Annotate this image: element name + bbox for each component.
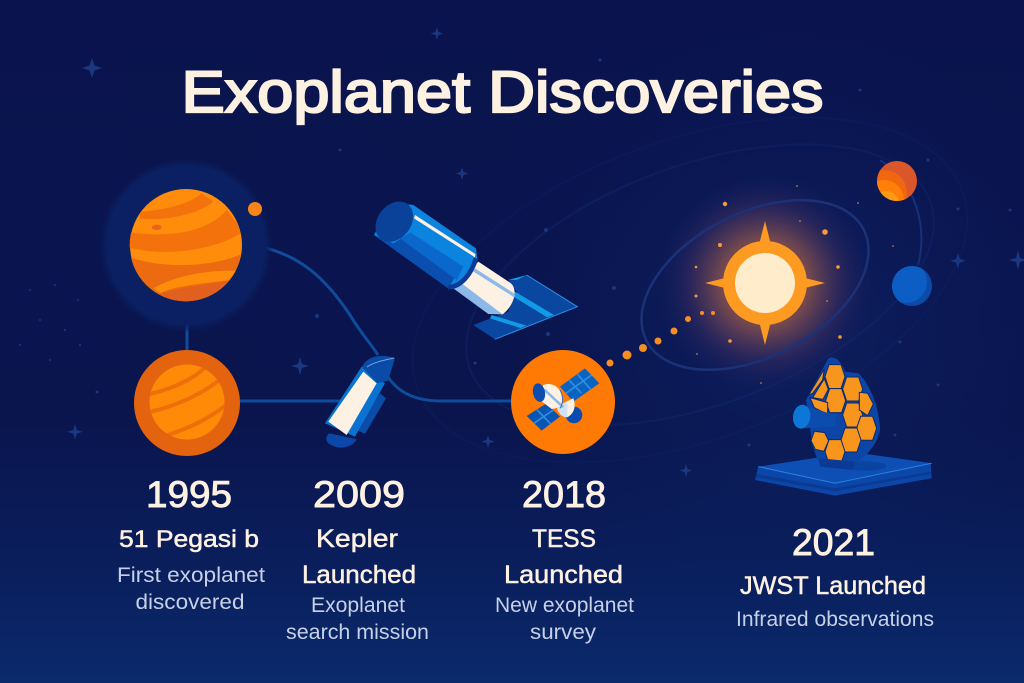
icon: James Webb telescope xyxy=(755,358,932,496)
mirror backing xyxy=(806,358,880,470)
name: Kepler xyxy=(316,525,398,553)
name: Launched xyxy=(302,561,416,589)
description: survey xyxy=(530,621,597,644)
satellite body xyxy=(566,407,582,423)
orbit around sun xyxy=(614,165,896,405)
name xyxy=(302,525,416,589)
column: 2021 xyxy=(736,522,934,631)
tube xyxy=(374,205,477,288)
title: Exoplanet Discoveries xyxy=(182,60,824,125)
name xyxy=(504,525,623,589)
description xyxy=(495,594,634,644)
planet: red-orange xyxy=(877,161,917,201)
description xyxy=(117,564,265,614)
planet: ringed orange disc xyxy=(134,350,240,456)
planet: blue xyxy=(892,266,932,306)
year: 2018 xyxy=(522,474,606,515)
description: discovered xyxy=(136,591,244,614)
description: Exoplanet xyxy=(311,594,405,617)
moon xyxy=(248,202,262,216)
satellite panels xyxy=(560,368,599,402)
body xyxy=(453,262,515,314)
dotted light trail xyxy=(606,311,715,366)
column: 2018 xyxy=(495,474,634,644)
year: 1995 xyxy=(146,474,232,515)
description: Infrared observations xyxy=(736,608,934,631)
sun glow xyxy=(655,173,875,393)
name: 51 Pegasi b xyxy=(119,526,259,553)
description: New exoplanet xyxy=(495,594,634,617)
description: search mission xyxy=(286,621,429,644)
background stars xyxy=(19,27,1024,477)
orbit particles xyxy=(694,185,894,384)
name: TESS xyxy=(532,525,596,553)
faint outer orbits xyxy=(366,50,1014,530)
sun xyxy=(705,221,825,345)
instrument arm xyxy=(802,405,836,428)
description: First exoplanet xyxy=(117,564,265,587)
column: 1995 xyxy=(117,474,265,614)
year: 2009 xyxy=(313,474,405,515)
timeline connectors xyxy=(187,245,515,401)
planet: 51 Pegasi b (large) xyxy=(98,157,274,333)
icon: TESS satellite disc xyxy=(511,350,615,454)
name: JWST Launched xyxy=(740,572,926,600)
base platform xyxy=(755,463,932,496)
icon: space telescope xyxy=(368,194,577,339)
year: 2021 xyxy=(792,522,875,563)
icon: Kepler rocket xyxy=(325,356,395,448)
name: Launched xyxy=(504,561,623,589)
description xyxy=(286,594,429,644)
column: 2009 xyxy=(286,474,429,644)
solar panel xyxy=(473,275,577,339)
mirror segments xyxy=(809,365,877,464)
